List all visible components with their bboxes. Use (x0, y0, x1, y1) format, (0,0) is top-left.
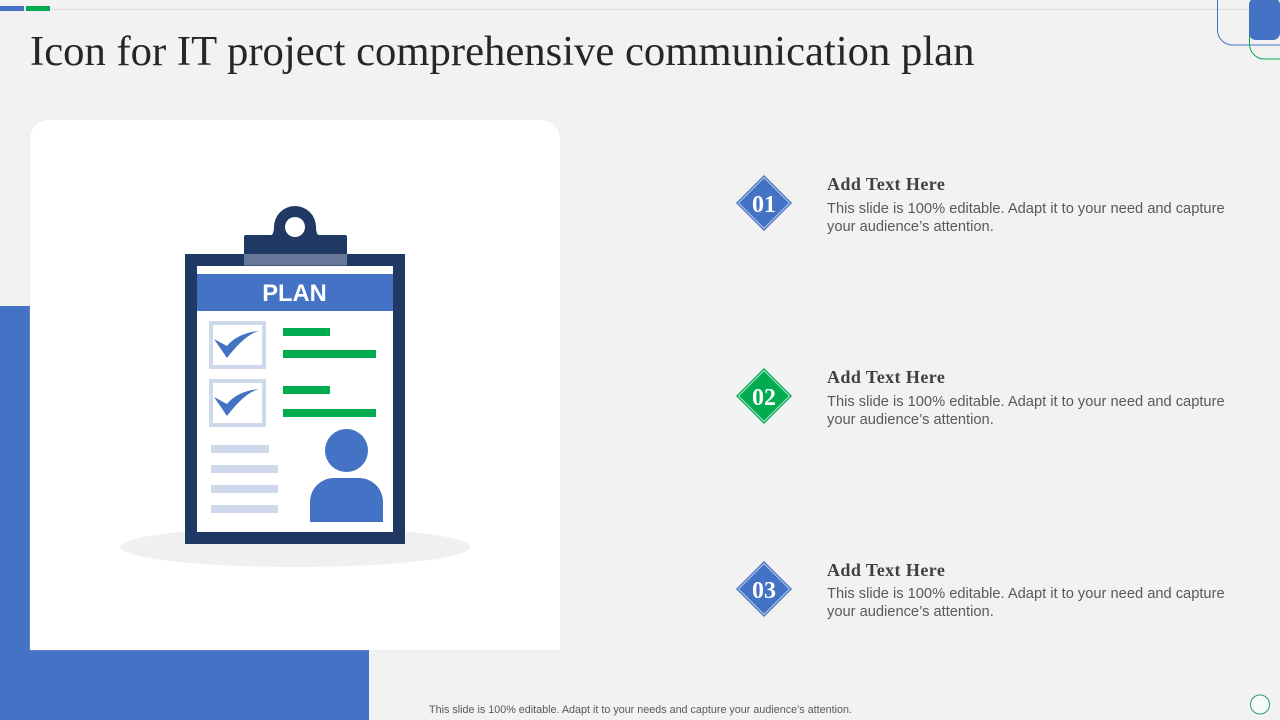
clip (244, 206, 347, 266)
plan label: PLAN (262, 281, 327, 307)
text block 2: This slide is 100% editable. Adapt it to your need and capture (827, 394, 1225, 410)
checkbox 2 (211, 381, 264, 425)
diamond badge 02 (736, 368, 792, 424)
text block 2 (827, 394, 1225, 428)
green lines (283, 328, 376, 417)
diamond badge 01 (736, 175, 792, 231)
footer circle (1250, 694, 1270, 714)
shadow ellipse (120, 527, 470, 567)
paper sheet (197, 266, 393, 532)
heading 1: Add Text Here (827, 174, 945, 194)
text block 3: This slide is 100% editable. Adapt it to your need and capture (827, 586, 1225, 602)
text block 1 (827, 201, 1225, 235)
heading 3: Add Text Here (827, 560, 945, 580)
text block 3 (827, 586, 1225, 620)
text block 2: your audience’s attention. (827, 412, 994, 428)
heading 2: Add Text Here (827, 367, 945, 387)
text block 3: your audience’s attention. (827, 604, 994, 620)
diamond badge 02: 02 (752, 385, 776, 411)
diamond badge 03: 03 (752, 578, 776, 604)
clipboard board (185, 254, 405, 544)
diamond badge 03 (736, 561, 792, 617)
text block 1: your audience’s attention. (827, 219, 994, 235)
title: Icon for IT project comprehensive communication plan (30, 28, 974, 75)
accent tab: green (26, 6, 50, 11)
corner decoration top right (1217, 0, 1280, 60)
person icon (310, 429, 383, 522)
light text lines (211, 445, 278, 513)
diamond badge 01: 01 (752, 192, 776, 218)
footer note: This slide is 100% editable. Adapt it to your needs and capture your audience’s attention. (429, 704, 852, 716)
checkbox 1 (211, 323, 264, 367)
text block 1: This slide is 100% editable. Adapt it to your need and capture (827, 201, 1225, 217)
panel: illustration card (30, 120, 560, 650)
plan header band (197, 274, 393, 311)
accent tab: blue (0, 6, 24, 11)
icon: clipboard plan (120, 206, 470, 567)
blue background block (0, 306, 369, 720)
